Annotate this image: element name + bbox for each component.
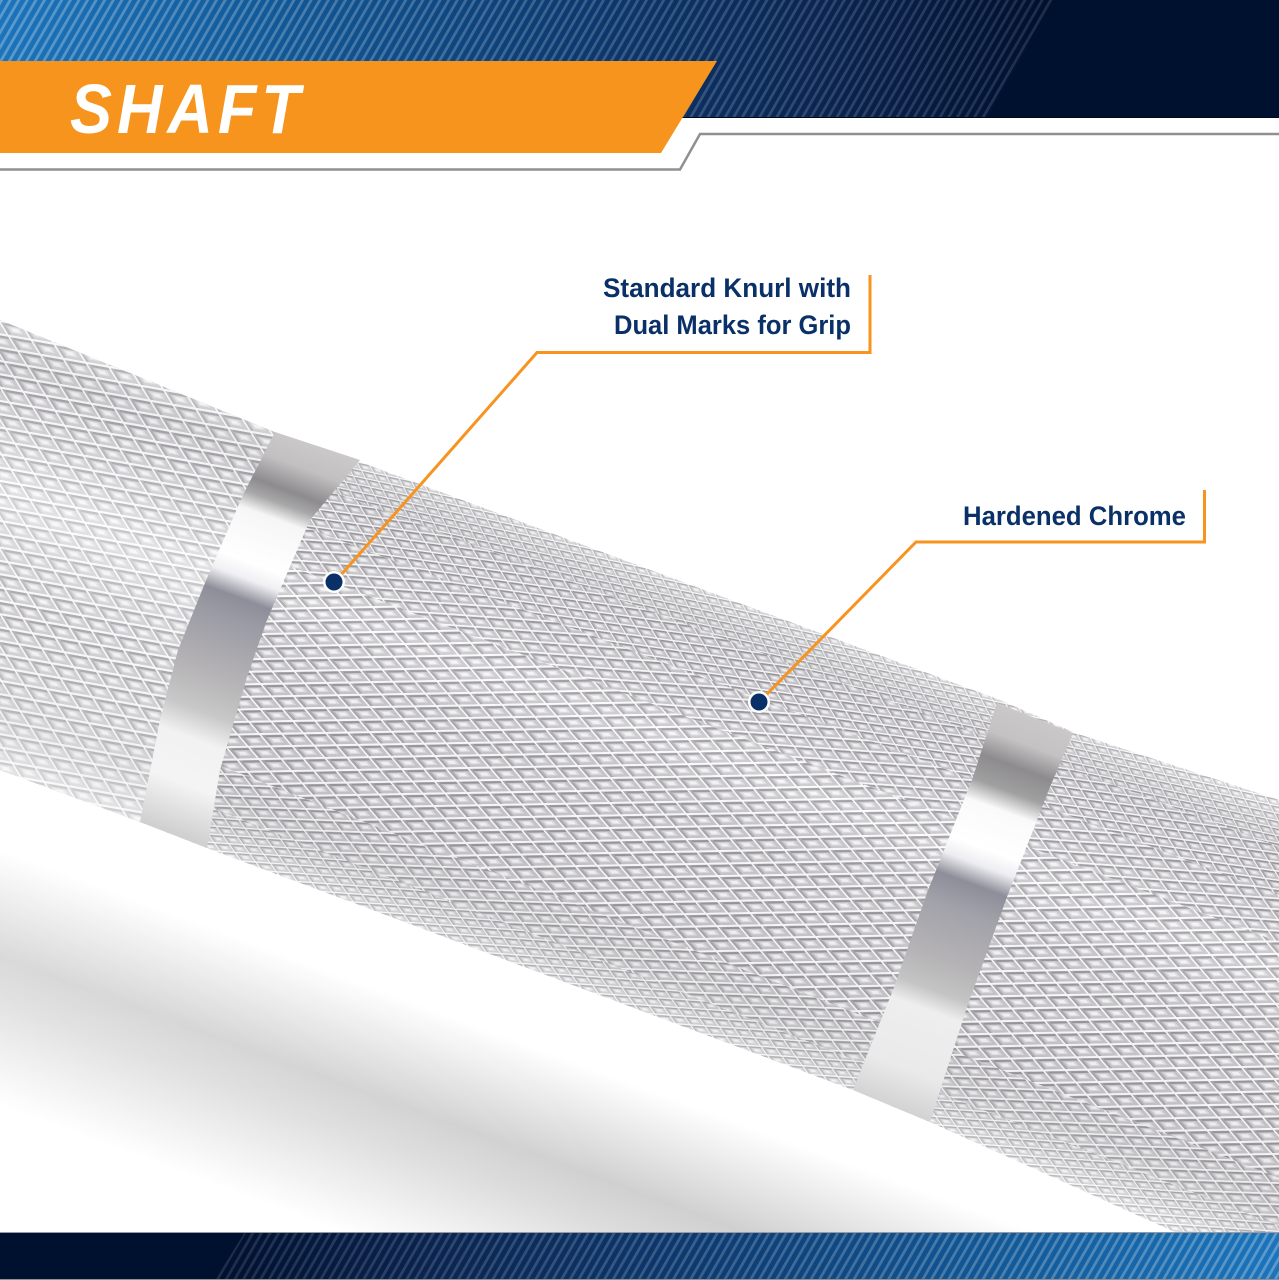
top header band: [0, 0, 1279, 118]
knurled surface: [0, 310, 1279, 1280]
leader line: [766, 490, 1204, 695]
callout text: Dual Marks for Grip: [614, 310, 851, 340]
header outline stroke: [0, 134, 1279, 170]
leader line: [340, 275, 870, 576]
callout: standard knurl: [323, 273, 870, 593]
marker dot: [748, 691, 770, 713]
floor shadow under the bar: [0, 740, 1279, 1280]
bottom footer band: [0, 1232, 1279, 1280]
title banner: [0, 61, 717, 153]
callout text: Hardened Chrome: [963, 501, 1186, 531]
title: SHAFT: [70, 71, 305, 149]
barbell shaft photo illustration: [0, 310, 1279, 1280]
smooth ring mark: left: [140, 432, 360, 848]
callout: hardened chrome: [748, 490, 1204, 713]
smooth ring mark: right: [853, 703, 1073, 1122]
marker dot: [323, 571, 345, 593]
white step under the header: [0, 118, 1279, 169]
callout text: Standard Knurl with: [603, 273, 851, 303]
